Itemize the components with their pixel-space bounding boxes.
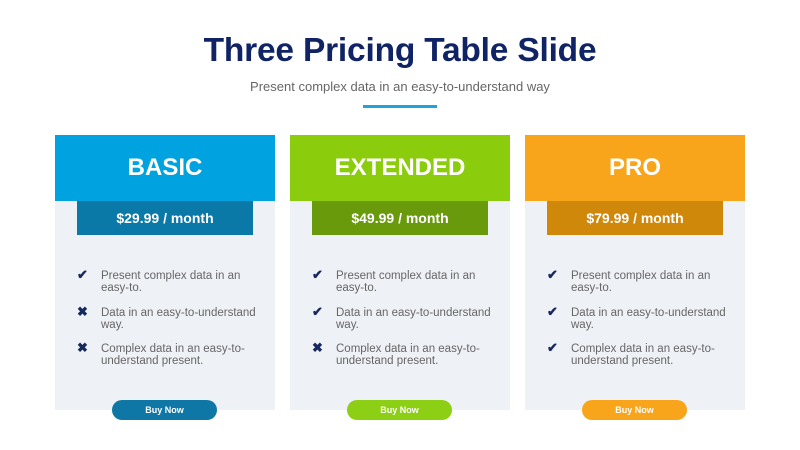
feature 2 bbox=[312, 304, 491, 331]
subtitle: Present complex data in an easy-to-understand way bbox=[250, 79, 550, 94]
panel: basic bbox=[55, 135, 275, 410]
header: pro bbox=[525, 135, 745, 201]
feature 1 bbox=[312, 267, 475, 294]
panel: extended: ✔ bbox=[312, 304, 323, 319]
panel: pro: Present complex data in an easy-to. bbox=[571, 270, 710, 294]
title: Three Pricing Table Slide bbox=[204, 32, 596, 69]
panel: pro: Complex data in an easy-to-understand present. bbox=[571, 343, 715, 367]
button: extended: Buy Now bbox=[380, 405, 419, 415]
price: pro: $79.99 / month bbox=[586, 210, 684, 226]
feature 2 bbox=[547, 304, 726, 331]
feature 2 bbox=[77, 304, 256, 331]
header: basic bbox=[55, 135, 275, 201]
panel: pro: Data in an easy-to-understand way. bbox=[571, 307, 726, 331]
panel: basic: Present complex data in an easy-to. bbox=[101, 270, 240, 294]
price: basic bbox=[77, 201, 253, 235]
panel: extended: ✖ bbox=[312, 340, 323, 355]
panel: basic: ✖ bbox=[77, 340, 88, 355]
feature 3 bbox=[312, 340, 480, 367]
panel: extended: Present complex data in an easy-to. bbox=[336, 270, 475, 294]
button: pro: Buy Now bbox=[615, 405, 654, 415]
header: extended: EXTENDED bbox=[335, 154, 465, 181]
price: pro bbox=[547, 201, 723, 235]
panel: extended: Data in an easy-to-understand way. bbox=[336, 307, 491, 331]
panel: basic: ✖ bbox=[77, 304, 88, 319]
header: extended bbox=[290, 135, 510, 201]
price: basic: $29.99 / month bbox=[116, 210, 214, 226]
button: basic bbox=[112, 400, 217, 420]
feature 3 bbox=[547, 340, 715, 367]
panel: pro: ✔ bbox=[547, 304, 558, 319]
panel: extended: Complex data in an easy-to-understand present. bbox=[336, 343, 480, 367]
header: basic: BASIC bbox=[128, 154, 202, 181]
feature 1 bbox=[77, 267, 240, 294]
price: extended bbox=[312, 201, 488, 235]
panel: extended: ✔ bbox=[312, 267, 323, 282]
panel: pro bbox=[525, 135, 745, 410]
header: pro: PRO bbox=[609, 154, 661, 181]
panel: basic: ✔ bbox=[77, 267, 88, 282]
panel: pro: ✔ bbox=[547, 267, 558, 282]
button: pro bbox=[582, 400, 687, 420]
panel: extended bbox=[290, 135, 510, 410]
panel: basic: Data in an easy-to-understand way. bbox=[101, 307, 256, 331]
button: extended bbox=[347, 400, 452, 420]
button: basic: Buy Now bbox=[145, 405, 184, 415]
price: extended: $49.99 / month bbox=[351, 210, 449, 226]
panel: basic: Complex data in an easy-to-understand present. bbox=[101, 343, 245, 367]
feature 1 bbox=[547, 267, 710, 294]
panel: pro: ✔ bbox=[547, 340, 558, 355]
feature 3 bbox=[77, 340, 245, 367]
